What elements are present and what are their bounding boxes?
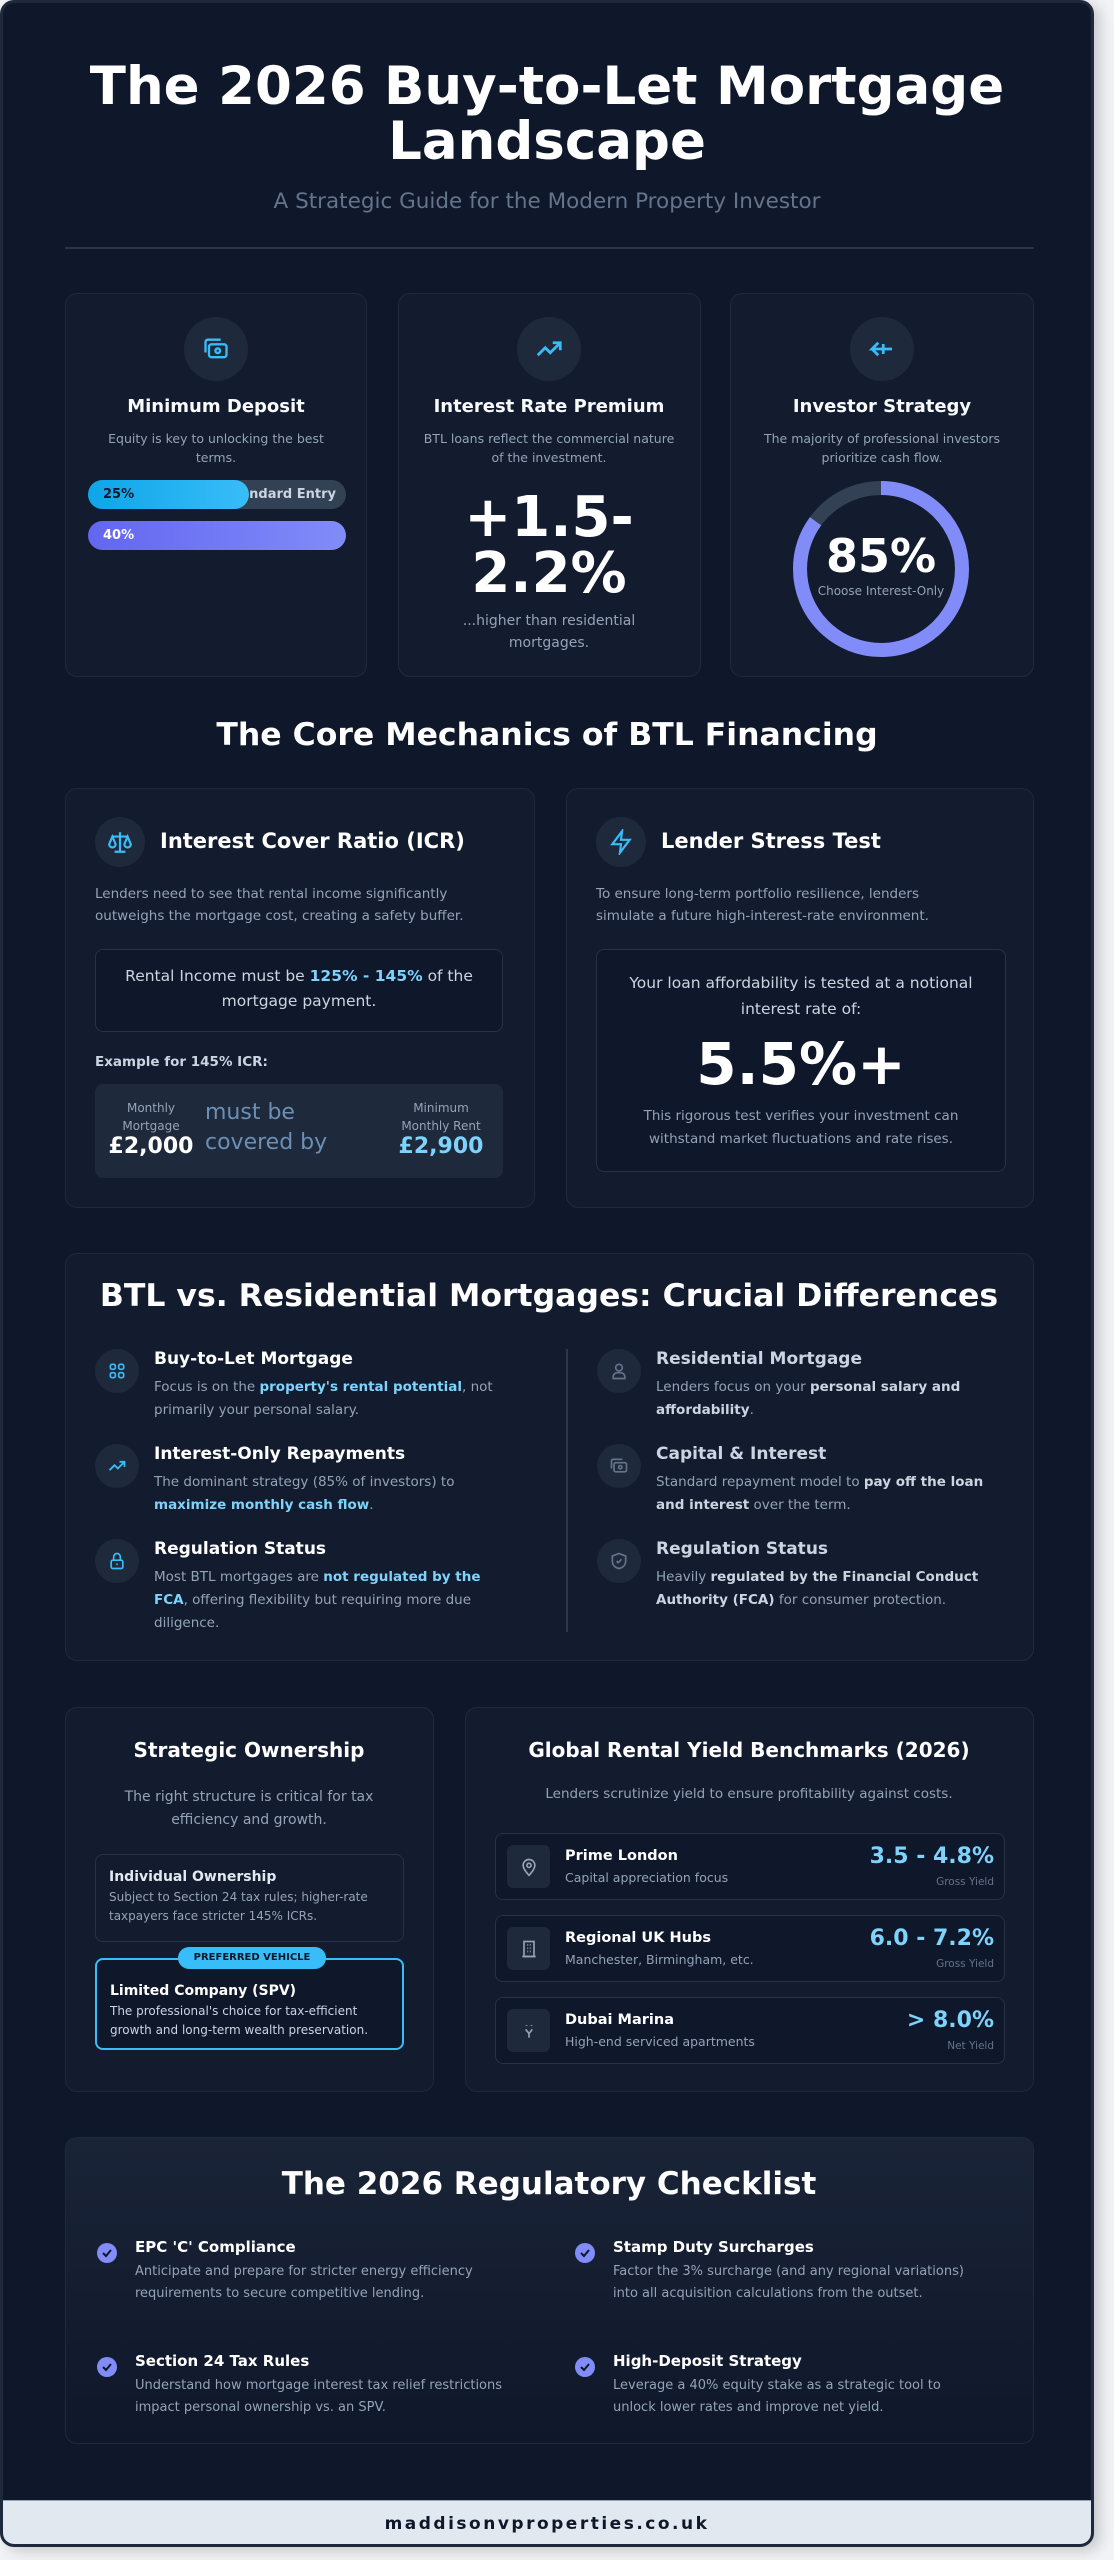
panel: regulatory checklist xyxy=(65,2137,1034,2444)
bar chart: deposits xyxy=(88,480,346,550)
row: prime london: 3.5 - 4.8% xyxy=(870,1844,994,1869)
panel: yield benchmarks xyxy=(465,1707,1034,2092)
heading: Lender Stress Test xyxy=(661,829,881,853)
panel: stress test xyxy=(566,788,1034,1208)
donut chart: Choose Interest-Only xyxy=(818,584,944,598)
big stat: +1.5- xyxy=(464,485,634,550)
item: capital & interest xyxy=(597,1444,983,1513)
item: high deposit: Leverage a 40% equity stake as a strategic tool to unlock lower rates and improve net yield. xyxy=(613,2378,941,2415)
panel: strategic ownership xyxy=(65,1707,434,2092)
item: residential regulation xyxy=(597,1539,978,1608)
heading: Minimum Deposit xyxy=(127,396,305,417)
title: The 2026 Buy-to-Let Mortgage xyxy=(90,56,1004,117)
donut chart: 85% xyxy=(826,529,936,583)
bar chart: deposits: Standard Entry xyxy=(225,487,336,502)
description: Equity is key to unlocking the best terms. xyxy=(108,431,324,465)
example box xyxy=(95,1084,503,1178)
icon: trend up xyxy=(517,317,581,381)
stat caption: ...higher than residential mortgages. xyxy=(463,613,635,651)
panel: investor strategy xyxy=(730,293,1034,677)
callout: stress rate xyxy=(596,949,1006,1172)
heading: Strategic Ownership xyxy=(134,1738,364,1762)
title xyxy=(90,56,1004,172)
example box: £2,000 xyxy=(109,1134,193,1159)
item: BTL mortgage: Buy-to-Let Mortgage xyxy=(154,1349,353,1369)
row: regional UK: Manchester, Birmingham, etc. xyxy=(565,1952,754,1967)
icon: money xyxy=(184,317,248,381)
item: interest-only xyxy=(95,1444,454,1513)
item: stamp duty: Factor the 3% surcharge (and any regional variations) into all acquisition calculations from the outset. xyxy=(613,2264,964,2301)
description: The right structure is critical for tax efficiency and growth. xyxy=(125,1789,373,1828)
row: dubai marina: Net Yield xyxy=(947,2040,994,2052)
item: EPC xyxy=(97,2238,473,2301)
panel: minimum deposit xyxy=(65,293,367,677)
item: interest-only: The dominant strategy (85% of investors) to maximize monthly cash flow. xyxy=(154,1474,454,1513)
heading: Interest Rate Premium xyxy=(434,396,664,417)
item: high deposit: High-Deposit Strategy xyxy=(613,2352,802,2370)
row: prime london: Prime London xyxy=(565,1848,678,1864)
callout: ICR rule: Rental Income must be 125% - 145% of the mortgage payment. xyxy=(125,967,473,1010)
box: individual ownership xyxy=(95,1854,404,1942)
bar chart: deposits: 25% xyxy=(103,487,134,502)
example box: Monthly xyxy=(127,1101,175,1115)
example box: covered by xyxy=(205,1130,327,1155)
icon: exchange xyxy=(850,317,914,381)
description: Lenders scrutinize yield to ensure profitability against costs. xyxy=(545,1786,953,1802)
heading: Investor Strategy xyxy=(793,396,971,417)
item: high deposit xyxy=(575,2352,941,2415)
example box: Monthly Rent xyxy=(401,1119,481,1133)
callout: stress rate: Your loan affordability is tested at a notional interest rate of: xyxy=(629,974,973,1018)
item: section 24: Section 24 Tax Rules xyxy=(135,2352,309,2370)
example label: Example for 145% ICR: xyxy=(95,1054,268,1070)
donut chart xyxy=(793,481,969,657)
footer xyxy=(3,2500,1091,2547)
row: regional UK: Regional UK Hubs xyxy=(565,1930,711,1946)
big stat: 5.5%+ xyxy=(696,1030,906,1098)
item: BTL regulation xyxy=(95,1539,480,1631)
row: dubai marina: High-end serviced apartments xyxy=(565,2034,755,2049)
panel: interest rate premium xyxy=(398,293,701,677)
item: residential mortgage: Lenders focus on your personal salary and affordability. xyxy=(656,1379,960,1418)
box: individual ownership: Subject to Section 24 tax rules; higher-rate taxpayers face stricter 145% ICRs. xyxy=(109,1890,368,1923)
item: EPC: Anticipate and prepare for stricter energy efficiency requirements to secure competitive lending. xyxy=(135,2264,473,2301)
example box: Minimum xyxy=(413,1101,469,1115)
item: interest-only: Interest-Only Repayments xyxy=(154,1444,405,1464)
panel: differences xyxy=(65,1253,1034,1661)
description: Lenders need to see that rental income significantly outweighs the mortgage cost, creating a safety buffer. xyxy=(95,886,464,924)
box: individual ownership: Individual Ownership xyxy=(109,1869,276,1885)
item: residential mortgage: Residential Mortgage xyxy=(656,1349,862,1369)
example box: must be xyxy=(205,1100,295,1125)
big stat: 2.2% xyxy=(471,541,627,606)
item: residential regulation: Heavily regulated by the Financial Conduct Authority (FCA) for consumer protection. xyxy=(656,1569,978,1608)
item: residential mortgage xyxy=(597,1349,960,1418)
row: prime london: Capital appreciation focus xyxy=(565,1870,728,1885)
heading: Interest Cover Ratio (ICR) xyxy=(160,829,465,853)
badge: preferred vehicle xyxy=(178,1947,326,1969)
example box: Mortgage xyxy=(122,1119,180,1133)
item: BTL regulation: Regulation Status xyxy=(154,1539,326,1559)
title: Landscape xyxy=(388,111,706,172)
heading: Global Rental Yield Benchmarks (2026) xyxy=(528,1738,970,1762)
row: regional UK: 6.0 - 7.2% xyxy=(870,1926,994,1951)
icon: bolt xyxy=(596,817,646,867)
item: capital & interest: Standard repayment model to pay off the loan and interest over the term. xyxy=(656,1474,983,1513)
item: BTL regulation: Most BTL mortgages are not regulated by the FCA, offering flexibility but requiring more due diligence. xyxy=(154,1569,480,1631)
icon: scales xyxy=(95,817,145,867)
description: To ensure long-term portfolio resilience, lenders simulate a future high-interest-rate environment. xyxy=(596,886,929,924)
big stat xyxy=(464,485,634,606)
item: stamp duty: Stamp Duty Surcharges xyxy=(613,2238,814,2256)
subtitle: A Strategic Guide for the Modern Property Investor xyxy=(274,189,820,214)
heading: BTL vs. Residential Mortgages: Crucial Differences xyxy=(100,1278,998,1314)
row: dubai marina xyxy=(495,1997,1005,2064)
item: stamp duty xyxy=(575,2238,964,2301)
item: section 24: Understand how mortgage interest tax relief restrictions impact personal ownership vs. an SPV. xyxy=(135,2378,502,2415)
box: limited company: Limited Company (SPV) xyxy=(110,1983,296,1999)
item: section 24 xyxy=(97,2352,502,2415)
callout: ICR rule xyxy=(95,949,503,1032)
row: regional UK: Gross Yield xyxy=(936,1958,994,1970)
item: capital & interest: Capital & Interest xyxy=(656,1444,826,1464)
description: BTL loans reflect the commercial nature of the investment. xyxy=(424,431,674,465)
description: The majority of professional investors prioritize cash flow. xyxy=(764,431,1000,465)
item: EPC: EPC 'C' Compliance xyxy=(135,2238,296,2256)
row: prime london xyxy=(495,1833,1005,1900)
row: regional UK xyxy=(495,1915,1005,1982)
footer: maddisonvproperties.co.uk xyxy=(385,2514,709,2534)
box: limited company: The professional's choice for tax-efficient growth and long-term wealth preservation. xyxy=(110,2004,368,2037)
bar chart: deposits: 40% xyxy=(103,528,134,543)
row: prime london: Gross Yield xyxy=(936,1876,994,1888)
badge: preferred vehicle: PREFERRED VEHICLE xyxy=(194,1952,310,1963)
panel: ICR xyxy=(65,788,535,1208)
callout: stress rate: This rigorous test verifies your investment can withstand market fluctuations and rate rises. xyxy=(644,1108,958,1147)
heading: The 2026 Regulatory Checklist xyxy=(282,2166,816,2202)
example box: £2,900 xyxy=(399,1134,483,1159)
item: BTL mortgage xyxy=(95,1349,493,1418)
item: BTL mortgage: Focus is on the property's rental potential, not primarily your personal salary. xyxy=(154,1379,493,1418)
item: residential regulation: Regulation Status xyxy=(656,1539,828,1559)
row: dubai marina: > 8.0% xyxy=(907,2008,994,2033)
section heading: core mechanics: The Core Mechanics of BTL Financing xyxy=(216,717,878,753)
box: limited company xyxy=(95,1958,404,2050)
row: dubai marina: Dubai Marina xyxy=(565,2012,674,2028)
